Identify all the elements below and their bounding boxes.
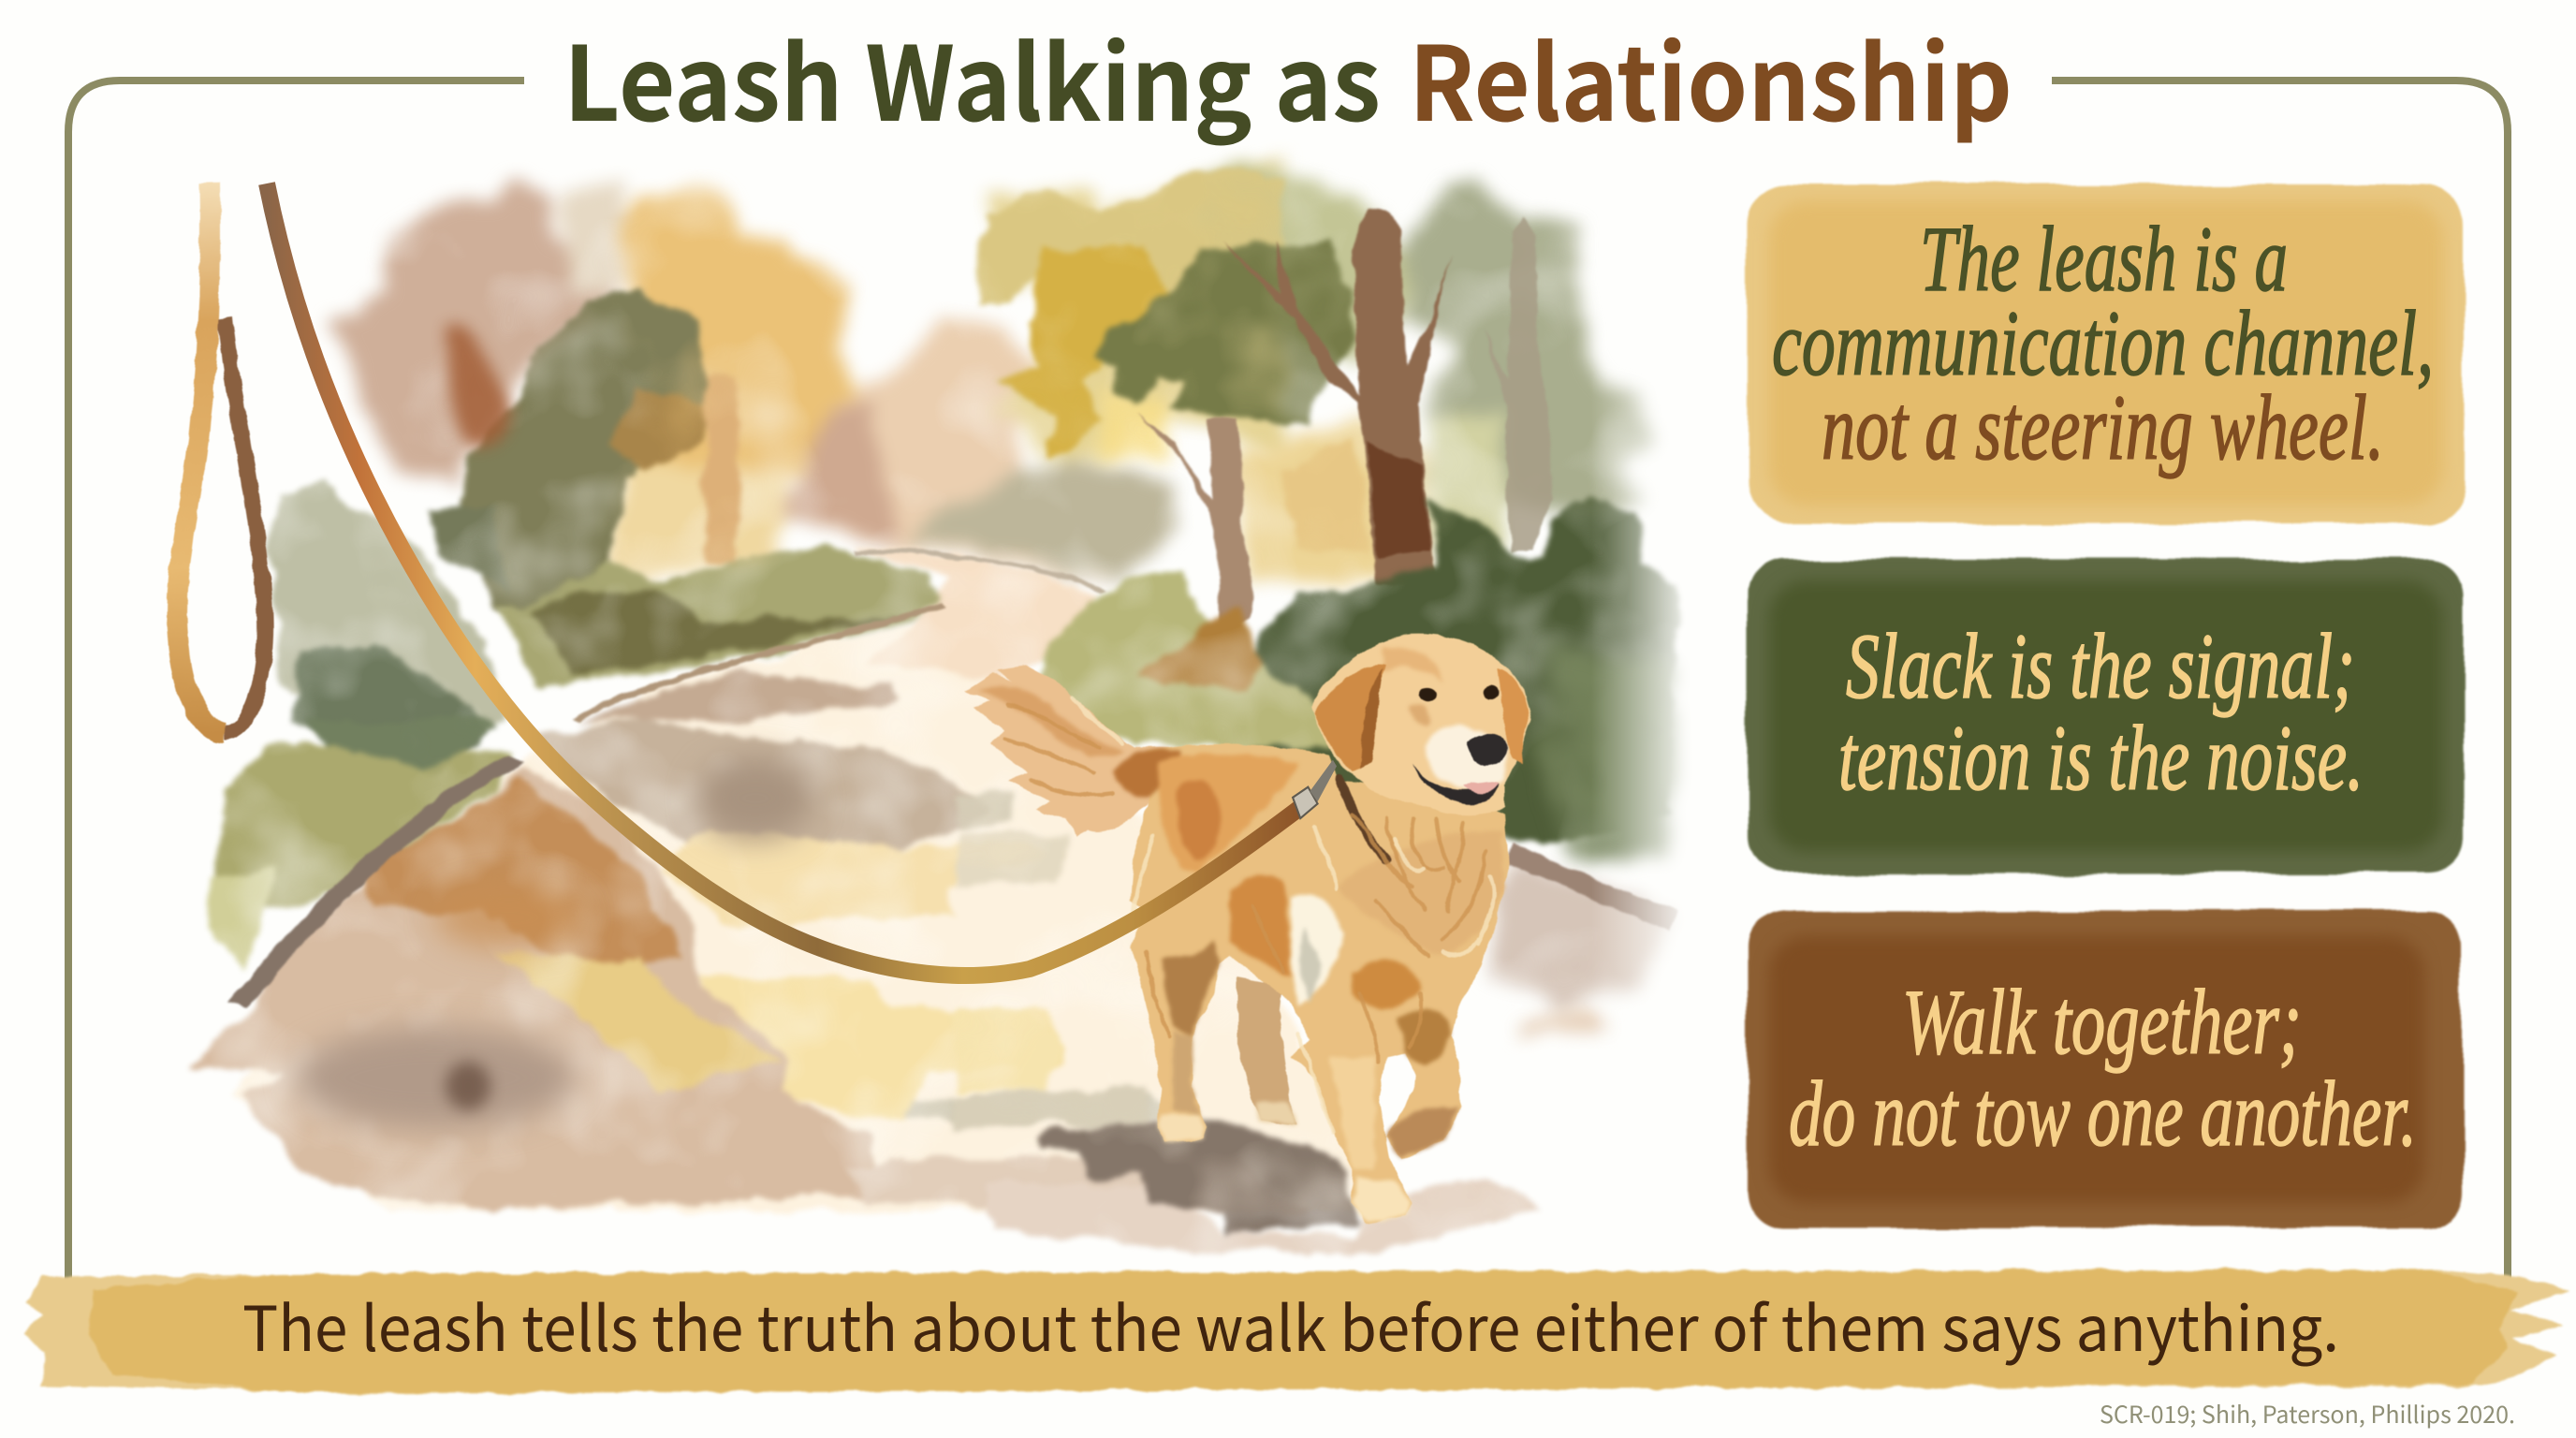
- card: communication channel: [1747, 184, 2464, 523]
- leash clip: [1293, 760, 1337, 818]
- card: slack and tension: tension is the noise.: [1838, 706, 2364, 810]
- dog: fur strands: [1004, 697, 1494, 1132]
- card: walk together: [1748, 911, 2463, 1227]
- right trees: [1098, 165, 1661, 584]
- rust tree core: [445, 324, 511, 448]
- title: Relationship: [1409, 1, 2012, 151]
- road edges: [238, 551, 1105, 1005]
- dog: coat washes: [977, 686, 1505, 1224]
- illustration: watercolor park path: [189, 159, 1722, 1211]
- card: walk together: Walk together;: [1902, 970, 2302, 1074]
- tree trunks: [1136, 210, 1553, 631]
- dog: ears, eyes, nose and mouth: [1314, 665, 1529, 804]
- dog shadow on road: [955, 793, 1543, 1256]
- grass and left shrubs: [205, 546, 944, 973]
- yellow and green foliage: [975, 165, 1367, 550]
- card: slack and tension: [1747, 559, 2464, 873]
- card: slack and tension: Slack is the signal;: [1846, 614, 2355, 718]
- pale green bush at right: [1538, 652, 1680, 858]
- road surface: [189, 550, 1396, 1211]
- road edge right: [1510, 854, 1674, 921]
- dog: head markings: [1383, 646, 1507, 788]
- source note: SCR-019; Shih, Paterson, Phillips 2020.: [2100, 1397, 2515, 1431]
- bottom banner: [22, 1269, 2569, 1393]
- hanging leash loop: [177, 183, 265, 733]
- olive tree and rust wash: [271, 289, 739, 775]
- road on the right: [1486, 857, 1675, 1036]
- golden retriever: [964, 634, 1531, 1224]
- rounded frame: [68, 81, 2508, 1281]
- right edge fade: [1591, 159, 1722, 1058]
- title: Leash Walking as: [564, 1, 1381, 151]
- dog: silhouette: [964, 634, 1531, 1224]
- left trees and hills: [332, 161, 1287, 587]
- banner text: The leash tells the truth about the walk before either of them says anything.: [242, 1280, 2339, 1370]
- long slack leash: [267, 183, 1337, 976]
- card: communication channel: The leash is a: [1920, 207, 2288, 311]
- road shadow pools: [296, 756, 812, 1128]
- title: [564, 1, 2012, 151]
- lower bushes behind the dog: [1039, 497, 1680, 845]
